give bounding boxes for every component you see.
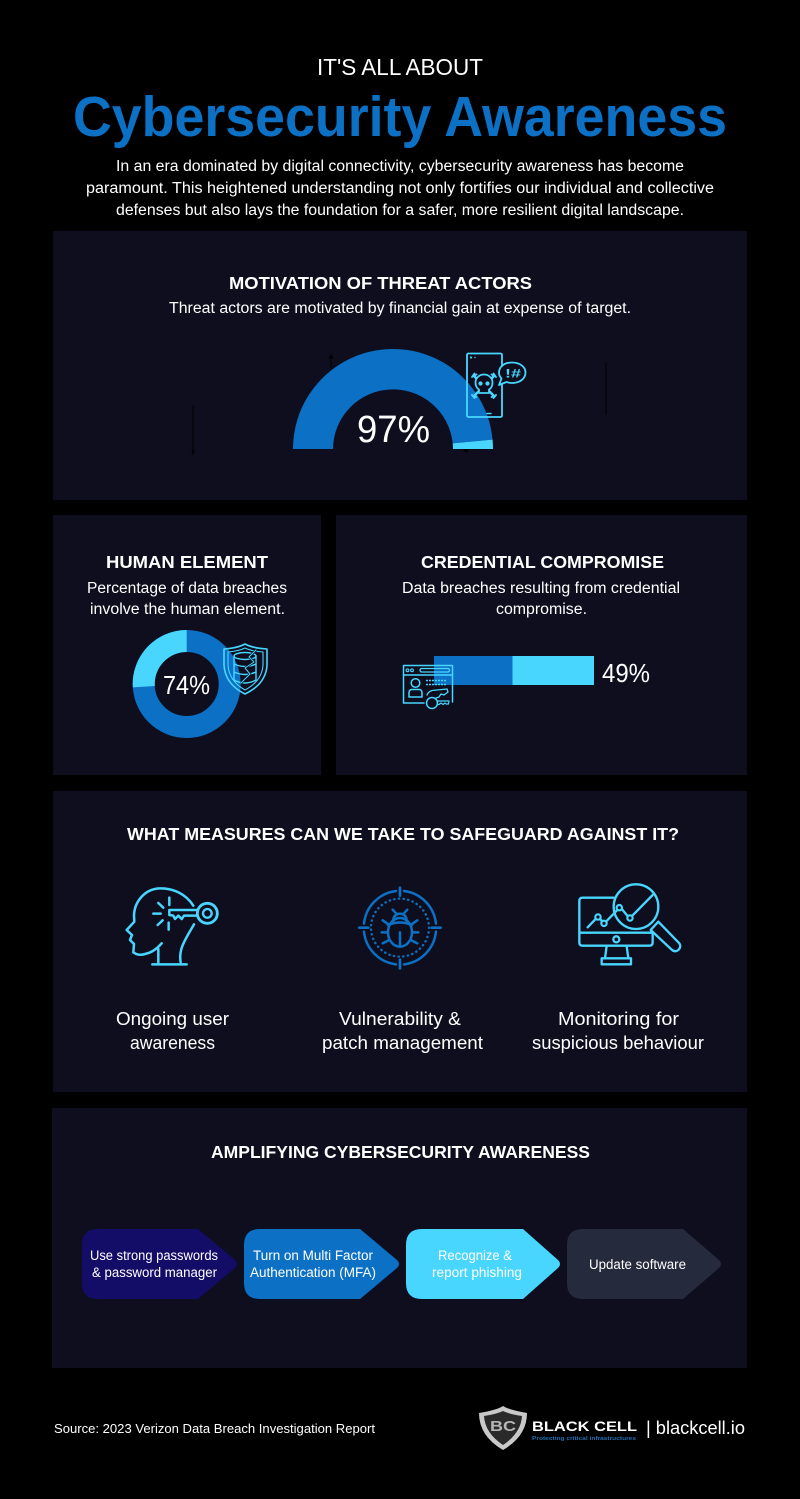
gauge chart 97%: 97% bbox=[357, 409, 430, 451]
icon: BC shield: BC bbox=[490, 1418, 516, 1435]
measure label: ongoing user awareness: awareness bbox=[130, 1032, 215, 1053]
measure label: ongoing user awareness: Ongoing user bbox=[116, 1008, 229, 1029]
arrow step: strong passwords: & password manager bbox=[92, 1265, 217, 1280]
intro paragraph bbox=[86, 158, 714, 219]
small black arrows bbox=[192, 355, 606, 454]
panel: motivation of threat actors bbox=[53, 231, 747, 500]
panel: safeguard measures bbox=[53, 791, 747, 1092]
icon: phone with skull: !# bbox=[505, 366, 521, 380]
icon: broken database shield bbox=[224, 644, 267, 694]
panel description bbox=[402, 580, 680, 618]
bar chart 49%: 49% bbox=[602, 658, 650, 688]
intro paragraph: paramount. This heightened understanding not only fortifies our individual and collective bbox=[86, 180, 714, 197]
gauge chart 97% bbox=[293, 349, 493, 451]
arrow step: report phishing: report phishing bbox=[432, 1265, 522, 1280]
measure label: monitoring for suspicious behaviour: suspicious behaviour bbox=[532, 1032, 704, 1053]
arrow step: strong passwords: Use strong passwords bbox=[90, 1248, 218, 1263]
arrow step: update software bbox=[567, 1229, 721, 1299]
donut chart 74% bbox=[133, 630, 230, 727]
panel description: Threat actors are motivated by financial gain at expense of target. bbox=[169, 300, 631, 317]
source note: Source: 2023 Verizon Data Breach Investigation Report bbox=[54, 1421, 375, 1436]
header bbox=[73, 54, 727, 219]
bar chart 49% bbox=[434, 656, 650, 688]
measure label: monitoring for suspicious behaviour: Monitoring for bbox=[558, 1008, 679, 1029]
panel: credential compromise bbox=[336, 515, 747, 775]
icon: phone with skull bbox=[467, 354, 526, 417]
intro paragraph: In an era dominated by digital connectivity, cybersecurity awareness has become bbox=[116, 158, 684, 175]
measure label: ongoing user awareness bbox=[116, 1008, 229, 1053]
icon: BC shield bbox=[479, 1406, 527, 1450]
panel description: Percentage of data breaches bbox=[87, 580, 287, 597]
panel heading: HUMAN ELEMENT bbox=[106, 552, 268, 572]
icon: monitor with magnifier bbox=[579, 884, 680, 964]
brand logo bbox=[479, 1406, 745, 1450]
panel description bbox=[87, 580, 287, 618]
logo wordmark: BLACK CELL bbox=[532, 1418, 638, 1434]
panel heading: CREDENTIAL COMPROMISE bbox=[421, 552, 664, 572]
measure label: monitoring for suspicious behaviour bbox=[532, 1008, 704, 1053]
measure label: vulnerability and patch management: patch management bbox=[322, 1032, 483, 1053]
main title: Cybersecurity Awareness bbox=[73, 85, 727, 149]
panel: human element bbox=[53, 515, 321, 775]
panel description: involve the human element. bbox=[90, 601, 285, 618]
panel description: compromise. bbox=[496, 601, 587, 618]
panel description: Data breaches resulting from credential bbox=[402, 580, 680, 597]
donut chart 74%: 74% bbox=[163, 670, 210, 700]
icon: head with key bbox=[127, 888, 217, 964]
intro paragraph: defenses but also lays the foundation for a safer, more resilient digital landscape. bbox=[116, 202, 684, 219]
measure label: vulnerability and patch management: Vulnerability & bbox=[339, 1008, 462, 1029]
arrow step: update software: Update software bbox=[589, 1257, 686, 1272]
website: | blackcell.io bbox=[646, 1417, 745, 1438]
arrow step: strong passwords bbox=[82, 1229, 237, 1299]
arrow step: multi factor authentication: Authentication (MFA) bbox=[250, 1265, 376, 1280]
panel heading: MOTIVATION OF THREAT ACTORS bbox=[229, 273, 532, 293]
panel: amplifying cybersecurity awareness bbox=[52, 1108, 747, 1368]
panel heading: WHAT MEASURES CAN WE TAKE TO SAFEGUARD AGAINST IT? bbox=[127, 824, 679, 844]
panel heading: AMPLIFYING CYBERSECURITY AWARENESS bbox=[211, 1142, 590, 1162]
icon: login window with keys bbox=[404, 666, 452, 708]
eyebrow title: IT'S ALL ABOUT bbox=[317, 54, 483, 80]
measure label: vulnerability and patch management bbox=[322, 1008, 483, 1053]
icon: bug in target bbox=[359, 888, 441, 968]
arrow step: report phishing: Recognize & bbox=[438, 1248, 512, 1263]
arrow step: multi factor authentication bbox=[244, 1229, 399, 1299]
arrow step: multi factor authentication: Turn on Multi Factor bbox=[253, 1248, 373, 1263]
logo tagline: Protecting critical infrastructures bbox=[532, 1436, 636, 1442]
arrow step: report phishing bbox=[406, 1229, 560, 1299]
